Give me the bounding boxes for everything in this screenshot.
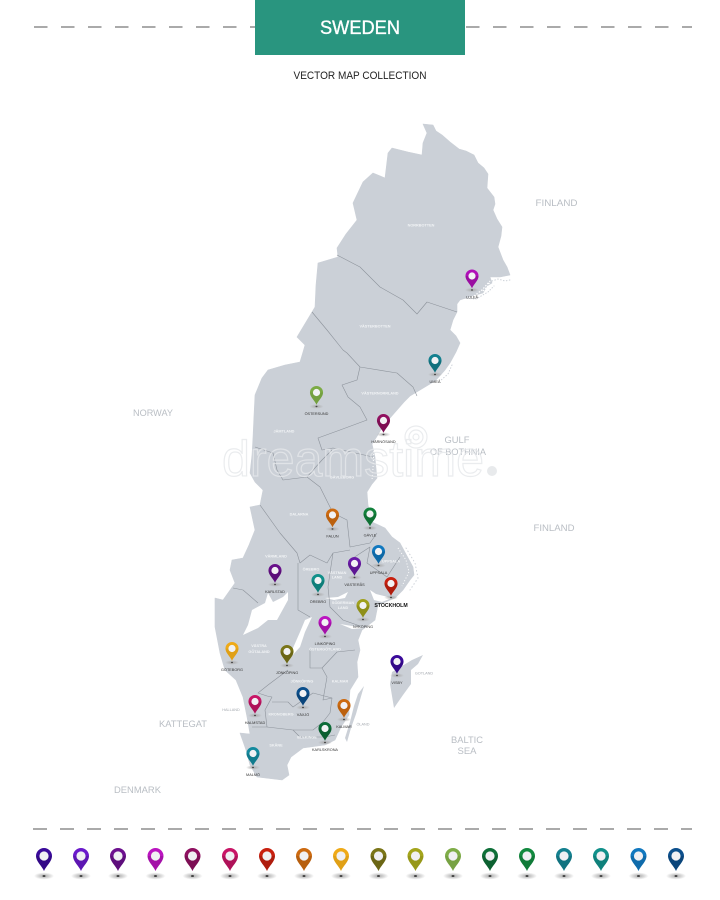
neighbouring area labels: NORWAY — [133, 408, 174, 419]
pin: Halmstad — [245, 695, 265, 725]
pin: Umea: UMEÅ — [430, 379, 441, 384]
legend pin 17 — [628, 848, 648, 880]
county labels: GOTLAND — [415, 672, 433, 676]
neighbouring area labels: GULF — [444, 435, 470, 446]
county labels: DALARNA — [290, 512, 309, 516]
pin: Ostersund: ÖSTERSUND — [305, 412, 329, 416]
county labels: JÖNKÖPING — [291, 678, 313, 684]
pin: Goteborg — [221, 642, 243, 672]
pin: Linkoping — [315, 616, 335, 646]
pin: Falun: FALUN — [326, 534, 339, 538]
pin legend row — [34, 848, 686, 880]
county labels: NORRBOTTEN — [408, 224, 435, 228]
county labels: UPPSALA — [382, 560, 400, 564]
county labels: VÄSTMAN — [328, 571, 347, 575]
pin: Lulea: LULEÅ — [466, 294, 478, 300]
legend pin 3 — [108, 848, 128, 880]
legend pin 9 — [331, 848, 351, 880]
pin: Harnosand — [371, 414, 396, 444]
pin: Linkoping: LINKÖPING — [315, 642, 335, 646]
legend pin 6 — [220, 848, 240, 880]
neighbouring area labels: DENMARK — [114, 785, 162, 796]
neighbouring area labels — [114, 198, 578, 796]
legend pin 14 — [517, 848, 537, 880]
pin: Kalmar: KALMAR — [336, 725, 352, 729]
legend pin 16 — [591, 848, 611, 880]
legend pin 7 — [257, 848, 277, 880]
county labels: KALMAR — [332, 680, 348, 684]
island: Gotland — [390, 655, 423, 708]
pin: Kalmar — [336, 699, 352, 729]
county borders — [233, 255, 457, 737]
pin: Orebro: ÖREBRO — [310, 600, 326, 604]
county labels: VÄRMLAND — [265, 554, 287, 558]
legend pin 10 — [368, 848, 388, 880]
pin: Orebro — [310, 574, 326, 604]
county labels: KRONOBERG — [268, 712, 294, 716]
pin: Malmo: MALMÖ — [246, 773, 260, 777]
legend pin 18 — [666, 848, 686, 880]
legend pin 4 — [146, 848, 166, 880]
pin: Stockholm: STOCKHOLM — [374, 603, 408, 609]
pin: Vaxjo — [296, 687, 310, 717]
legend pin 11 — [406, 848, 426, 880]
pin: Jonkoping — [276, 645, 298, 675]
pin: Ostersund — [305, 386, 329, 416]
mainland outline — [215, 124, 510, 780]
neighbouring area labels: FINLAND — [534, 523, 575, 534]
county labels: ÖSTERGÖTLAND — [309, 646, 341, 652]
coastal skerries — [406, 279, 510, 590]
pin: Nykoping — [353, 599, 373, 629]
county labels: VÄSTERBOTTEN — [359, 324, 391, 328]
neighbouring area labels: BALTIC — [451, 735, 483, 746]
legend pin 1 — [34, 848, 54, 880]
county labels: BLEKINGE — [297, 736, 317, 740]
pin: Visby: VISBY — [391, 681, 403, 685]
pin: Karlskrona: KARLSKRONA — [312, 748, 338, 752]
county labels: SÖDERMAN — [332, 600, 354, 605]
subtitle: VECTOR MAP COLLECTION — [294, 70, 427, 82]
legend pin 12 — [443, 848, 463, 880]
pin: Harnosand: HÄRNÖSAND — [371, 440, 396, 444]
county labels: SKÅNE — [269, 742, 283, 748]
legend pin 15 — [554, 848, 574, 880]
pin: Umea — [428, 354, 442, 384]
pin: Goteborg: GÖTEBORG — [221, 668, 243, 672]
pin: Malmo — [246, 747, 260, 777]
map of Sweden — [215, 124, 510, 780]
pin: Lulea — [465, 269, 479, 300]
pin: Vasteras — [344, 557, 365, 587]
county labels — [222, 224, 435, 748]
legend pin 2 — [71, 848, 91, 880]
pin: Karlstad — [265, 564, 285, 594]
county labels: LAND — [338, 606, 349, 610]
watermark: dreamstime — [222, 431, 484, 487]
neighbouring area labels: KATTEGAT — [159, 719, 207, 730]
county labels: ÖREBRO — [303, 566, 319, 572]
pin: Gavle — [363, 507, 377, 538]
pin: Stockholm — [374, 577, 408, 609]
legend pin 5 — [182, 848, 202, 880]
county labels: GÖTALAND — [248, 649, 270, 654]
pin: Halmstad: HALMSTAD — [245, 721, 265, 725]
island: Oland — [345, 686, 364, 742]
legend pin 8 — [294, 848, 314, 880]
county labels: LAND — [332, 576, 343, 580]
legend pin 13 — [480, 848, 500, 880]
title banner: SWEDEN — [320, 18, 400, 39]
pin: Gavle: GÄVLE — [364, 534, 377, 538]
county labels: HALLAND — [222, 708, 240, 712]
pin: Vasteras: VÄSTERÅS — [344, 582, 365, 587]
neighbouring area labels: SEA — [458, 746, 477, 757]
pin: Jonkoping: JÖNKÖPING — [276, 671, 298, 675]
pin: Falun — [326, 508, 340, 538]
county labels: VÄSTERNORRLAND — [361, 392, 399, 396]
pin: Uppsala — [370, 545, 388, 575]
neighbouring area labels: OF BOTHNIA — [430, 447, 487, 458]
county labels: ÖLAND — [356, 722, 370, 726]
pin: Visby — [390, 655, 404, 685]
pin: Karlskrona — [312, 722, 338, 752]
county labels: GÄVLEBORG — [330, 476, 354, 480]
pin: Uppsala: UPPSALA — [370, 571, 388, 575]
pin: Vaxjo: VÄXJÖ — [297, 713, 309, 717]
neighbouring area labels: FINLAND — [536, 198, 578, 209]
pin: Nykoping: NYKÖPING — [353, 625, 373, 629]
county labels: VÄSTRA — [251, 644, 267, 648]
lakes and coastal inlets — [243, 281, 490, 658]
pin: Karlstad: KARLSTAD — [265, 590, 285, 594]
county labels: JÄMTLAND — [274, 430, 295, 434]
title banner — [255, 0, 465, 55]
